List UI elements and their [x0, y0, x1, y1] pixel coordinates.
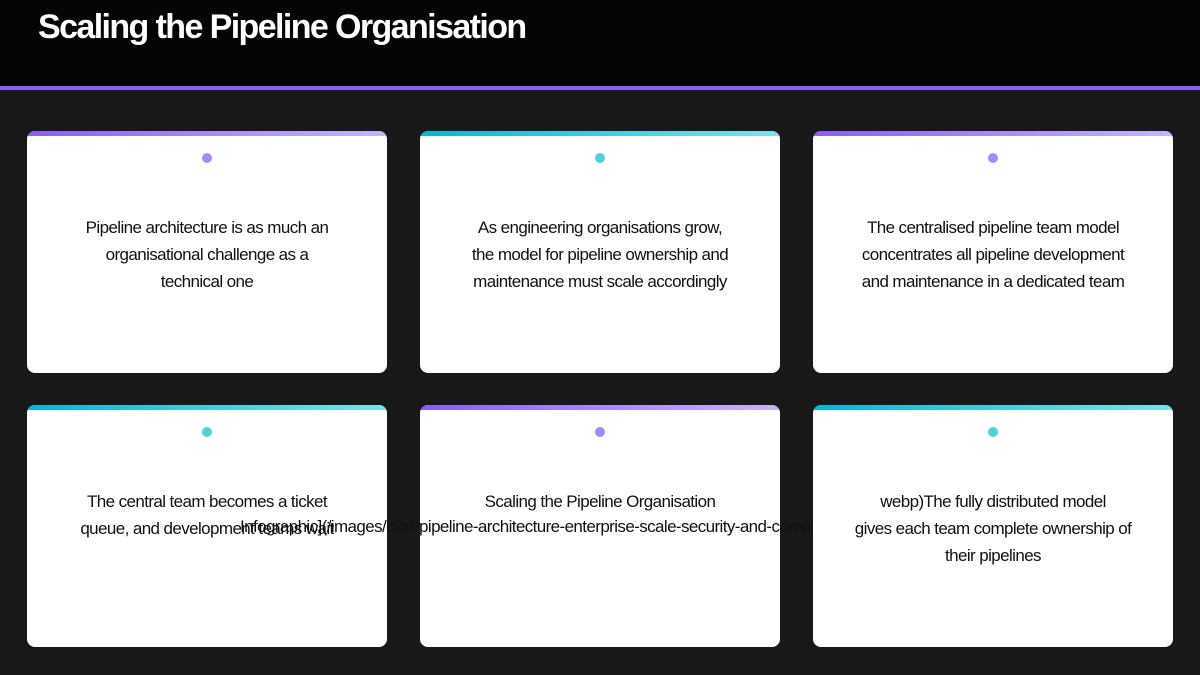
card 4: queue, and development teams wait — [80, 519, 334, 538]
card 1: technical one — [161, 272, 253, 291]
card 6: webp)The fully distributed model — [880, 492, 1106, 511]
card 3: concentrates all pipeline development — [862, 245, 1124, 264]
card 2: maintenance must scale accordingly — [473, 272, 727, 291]
header — [0, 0, 1200, 86]
card 1: Pipeline architecture is as much an — [86, 218, 328, 237]
card 4 — [27, 405, 387, 647]
card 1 — [27, 131, 387, 373]
card 2 — [420, 131, 780, 373]
card 5: Scaling the Pipeline Organisation — [485, 492, 715, 511]
card 3: The centralised pipeline team model — [867, 218, 1119, 237]
card 6 — [813, 405, 1173, 647]
card 1: organisational challenge as a — [106, 245, 308, 264]
card 2: the model for pipeline ownership and — [472, 245, 728, 264]
card 4: The central team becomes a ticket — [87, 492, 327, 511]
card 5 — [420, 405, 780, 647]
title: Scaling the Pipeline Organisation — [38, 8, 526, 46]
card 6: their pipelines — [945, 546, 1041, 565]
card 3 — [813, 131, 1173, 373]
card 6: gives each team complete ownership of — [855, 519, 1131, 538]
card 3: and maintenance in a dedicated team — [862, 272, 1124, 291]
card 2: As engineering organisations grow, — [478, 218, 722, 237]
